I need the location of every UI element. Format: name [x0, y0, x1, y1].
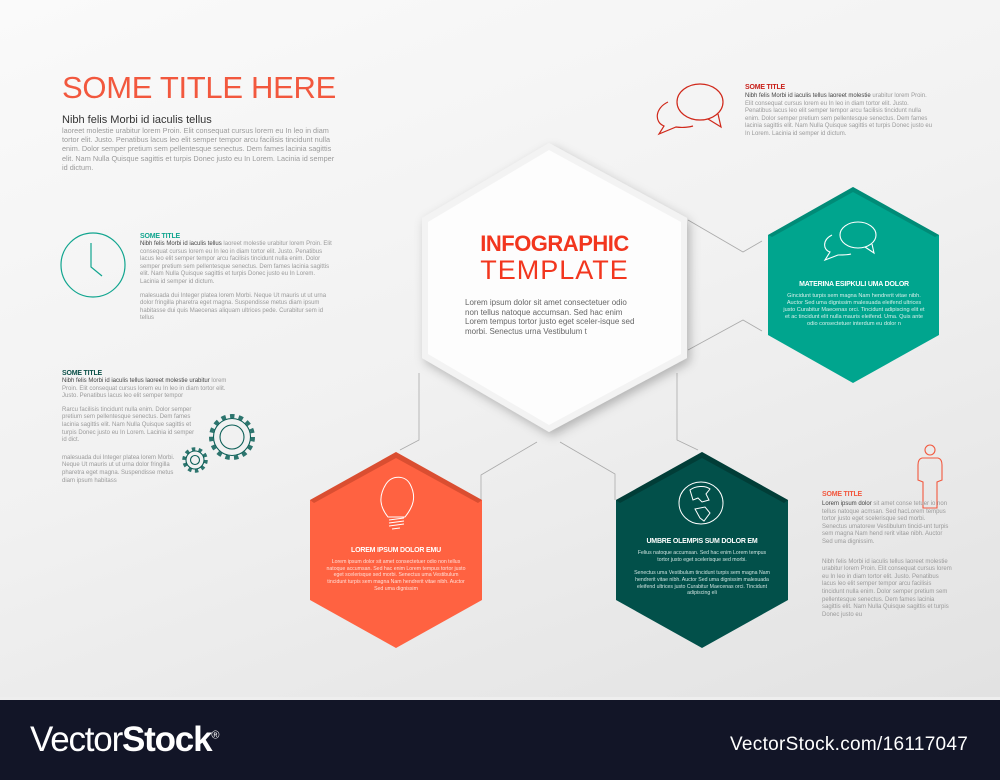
block: clock text [140, 233, 332, 321]
dark green hexagon [616, 452, 788, 648]
icon: speech bubbles white [825, 222, 876, 260]
intro text: laoreet molestie urabitur lorem Proin. Elit consequat cursus lorem eu In leo in diam tortor elit. Justo. Penatibus lacus leo elit semper tempor arcu facilisis tincidunt nulla enim. Dolor semper pretium sem pellentesque senectus. Dem fames lacinia sagittis elit. Nam Nulla Quisque sagittis et turpis Donec justo eu In Lorem. Lacinia id semper id dictum. [62, 126, 334, 172]
icon: speech bubbles red [657, 84, 723, 134]
orange hexagon [310, 452, 482, 648]
block: clock text: SOME TITLE [140, 233, 180, 240]
central hexagon [422, 143, 687, 432]
block: clock text: malesuada dui Integer platea lorem Morbi. Neque Ut mauris ut ut urna dolor fringilla pharetra eget magna. Suspendisse metus diam ipsum habitasse dui quis Maecenas aliquam ultrices pede. Curabitur sem id tellus [140, 293, 326, 321]
icon: globe [679, 482, 723, 524]
block: person text: Nibh felis Morbi id iaculis tellus laoreet molestie urabitur lorem Proin. Elit consequat cursus lorem eu In leo in diam tortor elit. Justo. Penatibus lacus leo elit semper tempor arcu facilisis tincidunt nulla enim. Dolor semper pretium sem pellentesque senectus. Dem fames lacinia sagittis elit. Nam Nulla Quisque sagittis et turpis Donec justo eu [822, 559, 952, 618]
block: person text: Lorem ipsum dolor sit amet conse tetuer io non tellus natoque acmsan. Sed hacLorem tempus tortor justo eget scelerisque sed morbi. Senectus umatorew Vestibulum tincid-unt turpis sem magna Nam hend rerit vitae nibh. Auctor Sed uma dignissim. [822, 501, 948, 545]
icon: lightbulb [381, 477, 414, 529]
center title: TEMPLATE [480, 255, 629, 285]
block: person text: SOME TITLE [822, 491, 862, 498]
icon: clock [61, 233, 125, 297]
dark green hex text: UMBRE OLEMPIS SUM DOLOR EM [646, 538, 758, 545]
main title: SOME TITLE HERE [62, 70, 336, 105]
footer url: VectorStock.com/16117047 [730, 734, 968, 755]
dark green hex text [634, 538, 770, 596]
dark green hex text: Felius natoque accumsan. Sed hac enim Lorem tempus tortor justo eget scelerisque sed morbi. [638, 550, 766, 563]
block: gears text: Rarcu facilisis tincidunt nulla enim. Dolor semper pretium sem pellentesque senectus. Dem fames lacinia sagittis elit. Nam Nulla Quisque sagittis et turpis Donec justo eu In Lorem. Lacinia id semper id dict. [62, 407, 194, 443]
dark green hex text: Senectus uma Vestibulum tincidunt turpis sem magna Nam hendrerit vitae nibh. Auctor Sed uma dignissim malesuada eleifend ultrices justo Curabitur Maecenas orci. Tincidunt adipiscing eli [634, 570, 770, 596]
block: gears text: Nibh felis Morbi id iaculis tellus laoreet molestie urabitur lorem Proin. Elit consequat cursus lorem eu In leo in diam tortor elit. Justo. Penatibus lacus leo elit semper tempor [62, 378, 226, 399]
block: person text [822, 491, 952, 618]
teal hexagon [768, 187, 939, 383]
block: gears text [62, 370, 226, 484]
block: top right: Nibh felis Morbi id iaculis tellus laoreet molestie urabitur lorem Proin. Elit consequat cursus lorem eu In leo in diam tortor elit. Justo. Penatibus lacus leo elit semper tempor arcu facilisis tincidunt nulla enim. Dolor semper pretium sem pellentesque senectus. Dem fames lacinia sagittis elit. Nam Nulla Quisque sagittis et turpis Donec justo eu In Lorem. Lacinia id semper id dictum. [745, 93, 932, 137]
center title [480, 231, 629, 285]
footer logo: VectorStock® [30, 720, 218, 759]
teal hex text: Gincidunt turpis sem magna Nam hendrerit vitae nibh. Auctor Sed uma dignissim malesuada eleifend ultrices justo Curabitur Maecenas orci. Tincidunt adipiscing elit et et ac tincidunt elit nulla mauris eleifend. Uma. Quis ante odio consectetuer interdum eu dolor n [783, 293, 925, 327]
subtitle: Nibh felis Morbi id iaculis tellus [62, 114, 212, 126]
center title: INFOGRAPHIC [480, 231, 629, 256]
block: clock text: Nibh felis Morbi id iaculis tellus laoreet molestie urabitur lorem Proin. Elit consequat cursus lorem eu In leo in diam tortor elit. Justo. Penatibus lacus leo elit semper tempor arcu facilisis tincidunt nulla enim. Dolor semper pretium sem pellentesque senectus. Dem fames lacinia sagittis elit. Nam Nulla Quisque sagittis et turpis Donec justo eu In Lorem. Lacinia id semper id dictum. [140, 241, 332, 285]
orange hex text: Lorem ipsum dolor sit amet consectetuer odio non tellus natoque accumsan. Sed hac enim Lorem tempus tortor justo eget scelerisque sed morbi. Senectus uma Vestibulum tincidunt turpis sem magna Nam hendrerit vitae nibh. Auctor Sed uma dignissim [326, 559, 465, 592]
orange hex text: LOREM IPSUM DOLOR EMU [351, 547, 441, 554]
teal hex text: MATERINA ESIPKULI UMA DOLOR [799, 281, 909, 288]
connector lines [400, 220, 762, 500]
icon: person [918, 445, 942, 508]
block: gears text: SOME TITLE [62, 370, 102, 377]
icon: gears [184, 416, 253, 471]
footer bar [0, 700, 1000, 780]
block: gears text: malesuada dui Integer platea lorem Morbi. Neque Ut mauris ut ut urna dolor fringilla pharetra eget magna. Suspendisse metus diam ipsum habitass [62, 455, 174, 484]
block: top right: SOME TITLE [745, 84, 785, 91]
center text: Lorem ipsum dolor sit amet consectetuer odio non tellus natoque accumsan. Sed hac enim Lorem tempus tortor justo eget sceler-isque sed morbi. Senectus urna Vestibulum t [465, 298, 634, 336]
